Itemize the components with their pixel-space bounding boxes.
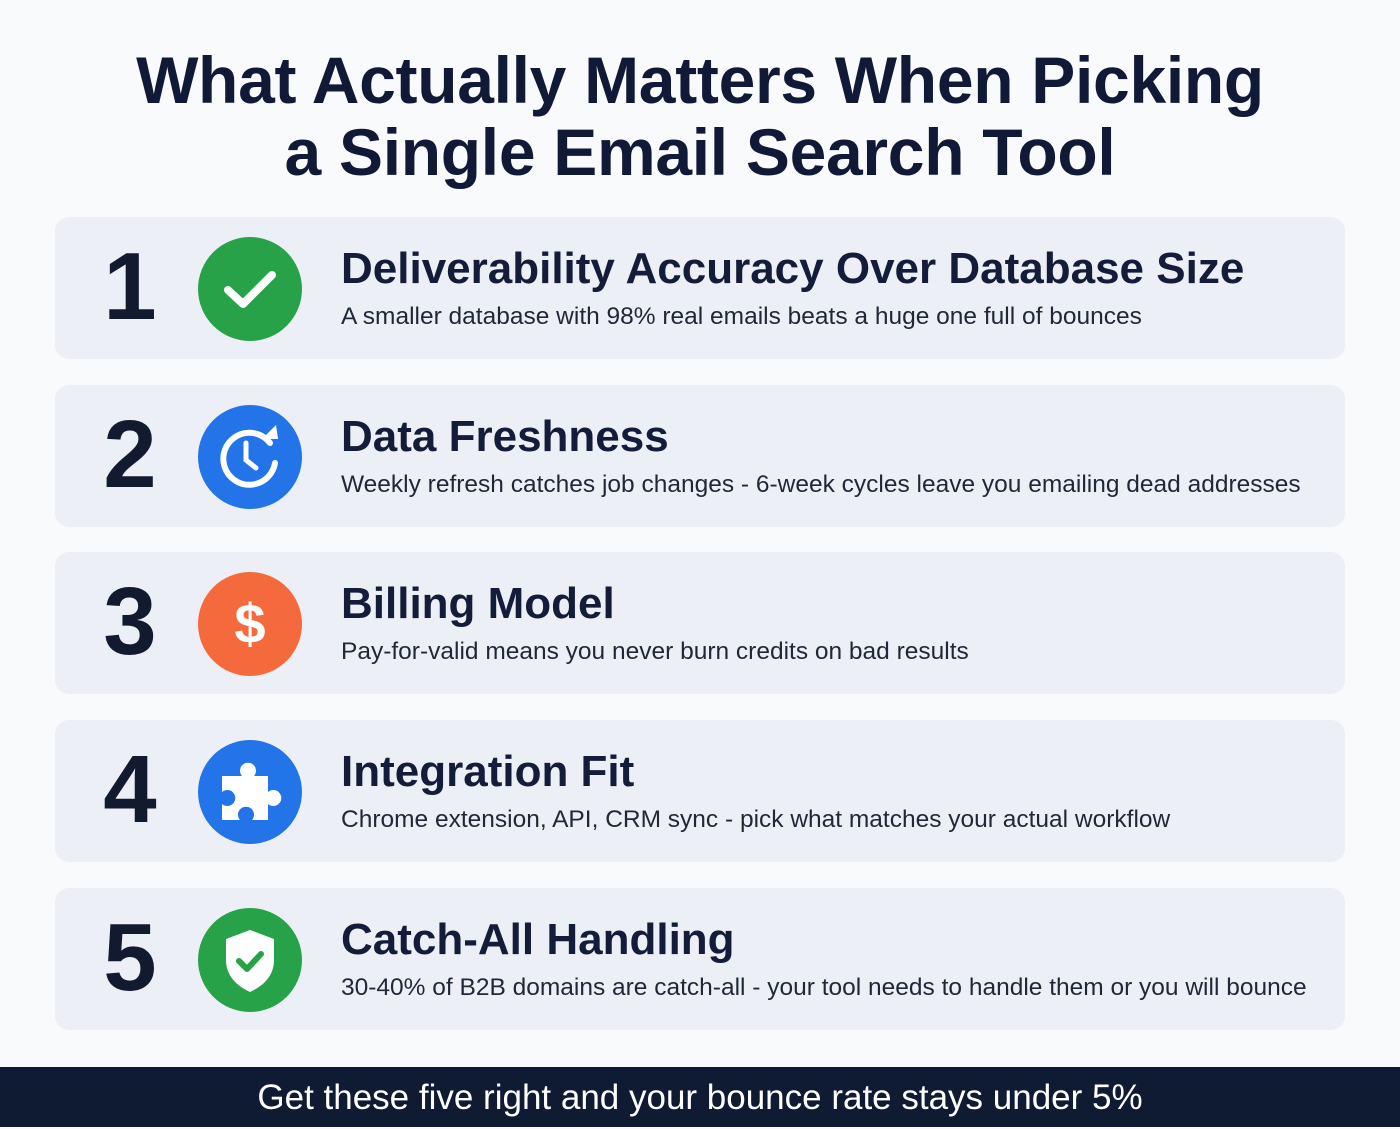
number 5: 5 [103,904,157,1011]
number 1: 1 [103,233,157,340]
heading 2: Data Freshness [341,412,669,461]
text 5: 30-40% of B2B domains are catch-all - your tool needs to handle them or you will bounce [341,974,1307,1001]
number 3: 3 [103,568,157,675]
heading 3: Billing Model [341,579,615,628]
text 4: Chrome extension, API, CRM sync - pick what matches your actual workflow [341,806,1170,833]
panel: item 2 [55,385,1345,527]
footer banner [0,1067,1400,1127]
text 2: Weekly refresh catches job changes - 6-week cycles leave you emailing dead addresses [341,471,1301,498]
icon: puzzle [198,740,302,844]
panel: item 5 [55,888,1345,1030]
heading 4: Integration Fit [341,747,634,796]
panel: item 3 [55,552,1345,694]
icon: clock refresh [198,405,302,509]
text 1: A smaller database with 98% real emails beats a huge one full of bounces [341,303,1142,330]
text 3: Pay-for-valid means you never burn credits on bad results [341,638,969,665]
footer banner: Get these five right and your bounce rate stays under 5% [257,1078,1143,1117]
title: What Actually Matters When Picking [136,43,1264,117]
icon: check [198,237,302,341]
panel: item 1 [55,217,1345,359]
icon: shield check [198,908,302,1012]
panel: item 4 [55,720,1345,862]
icon: dollar: $ [234,592,266,655]
icon: dollar [198,572,302,676]
number 2: 2 [103,401,157,508]
heading 5: Catch-All Handling [341,915,735,964]
number 4: 4 [103,736,157,843]
title: a Single Email Search Tool [285,115,1115,189]
title [136,43,1264,189]
heading 1: Deliverability Accuracy Over Database Size [341,244,1244,293]
